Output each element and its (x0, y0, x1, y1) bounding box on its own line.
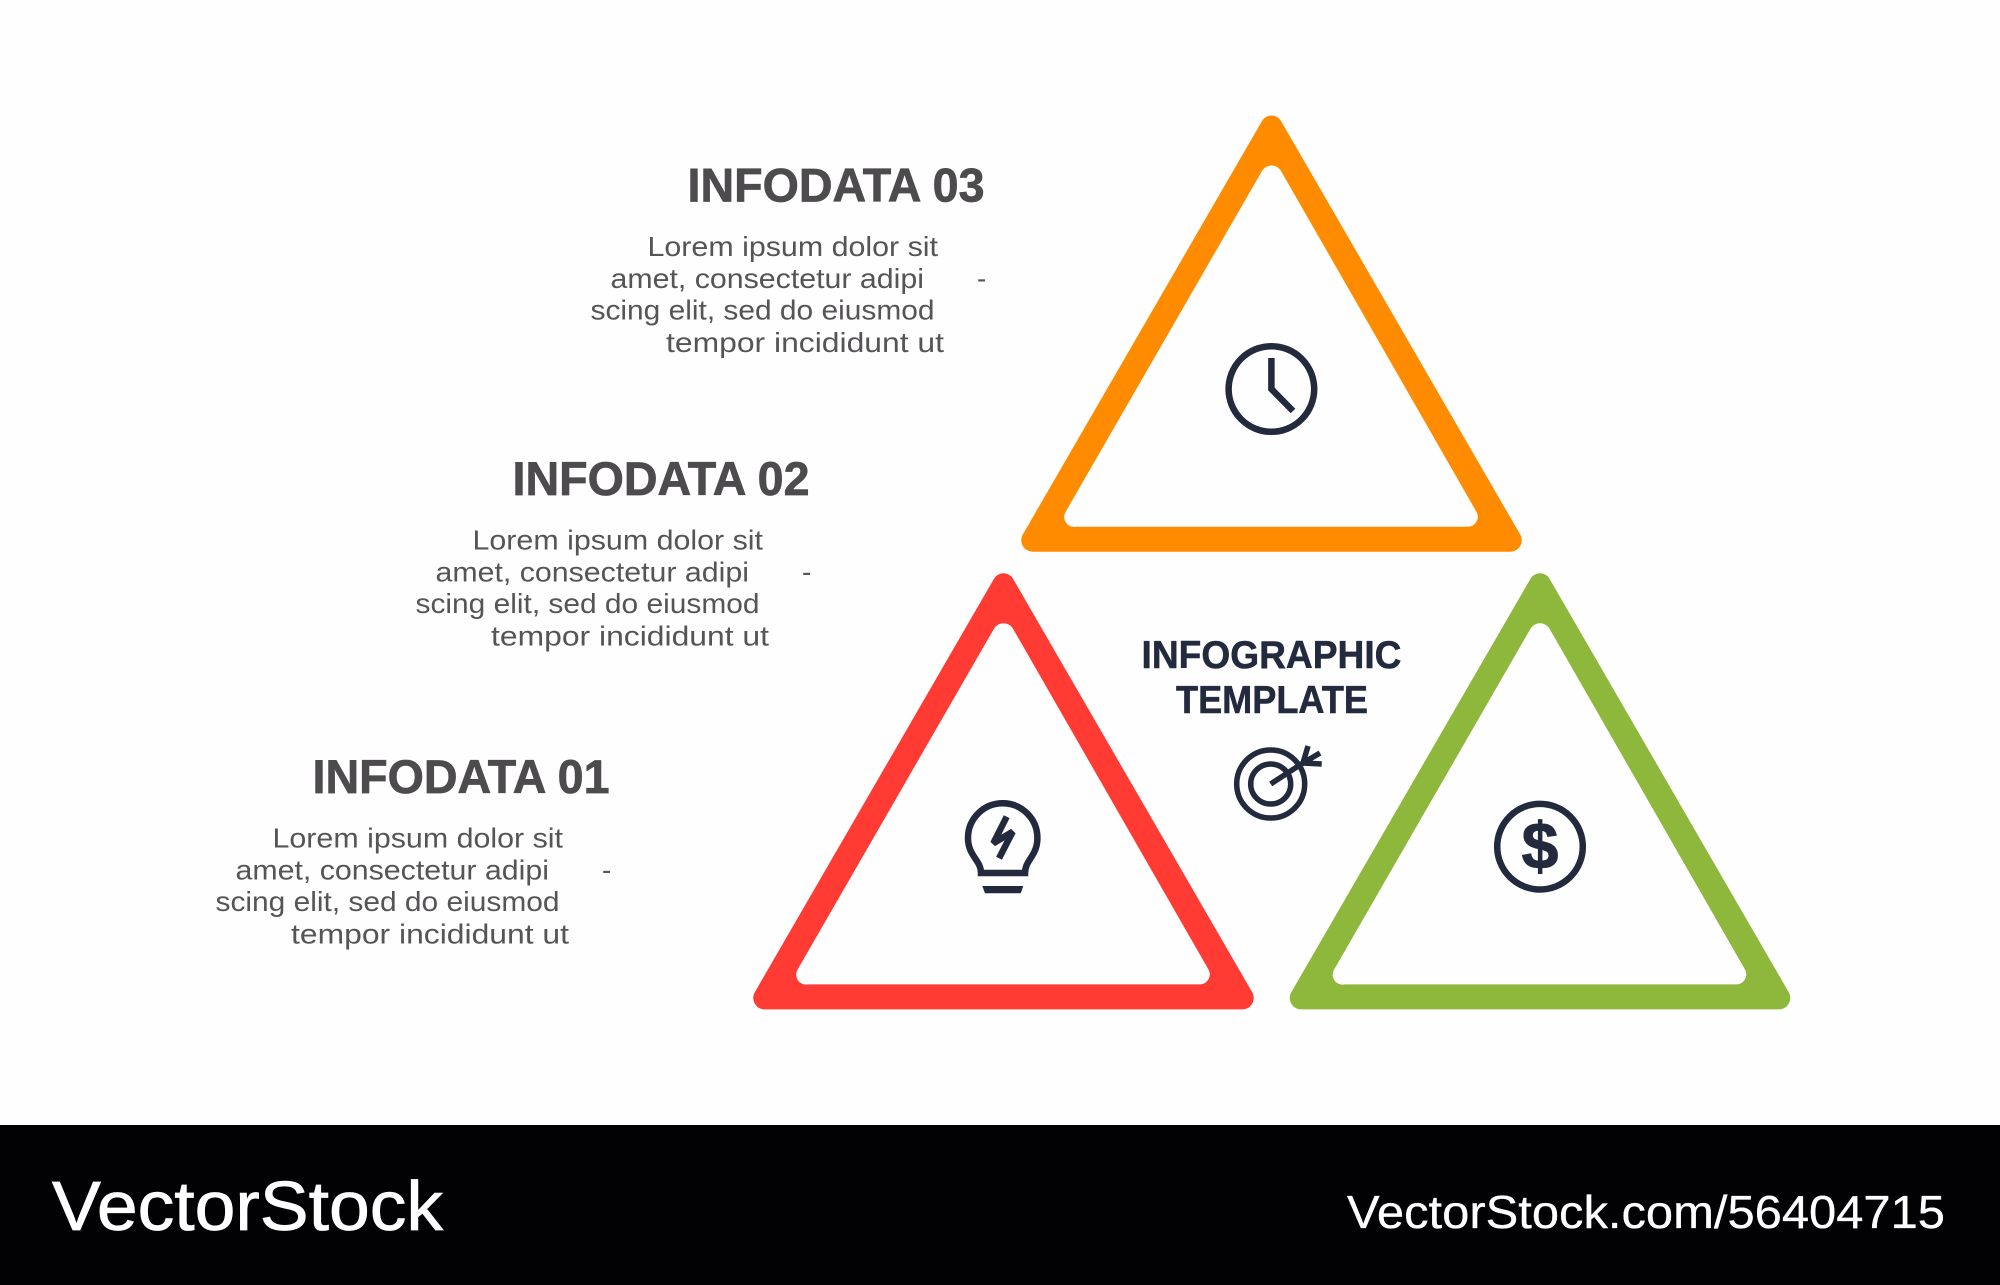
text block: infodata 01: Lorem ipsum dolor sit (272, 822, 563, 853)
triangle: green (1290, 573, 1790, 1009)
text block: infodata 03: INFODATA 03 (688, 158, 984, 212)
text block: infodata 01: - (602, 854, 611, 885)
icon: light bulb (968, 803, 1037, 893)
text block: infodata 02: scing elit, sed do eiusmod (416, 588, 760, 619)
text block: infodata 03: - (977, 263, 986, 294)
text block: infodata 01: amet, consectetur adipi (236, 854, 549, 885)
title: TEMPLATE (1176, 679, 1368, 722)
icon: dollar coin: $ (1522, 808, 1558, 882)
text block: infodata 02: tempor incididunt ut (491, 620, 769, 652)
icon: clock (1229, 346, 1314, 432)
triangle: orange (1021, 116, 1522, 552)
footer url: VectorStock.com/56404715 (1347, 1186, 1945, 1238)
text block: infodata 01: tempor incididunt ut (291, 918, 569, 950)
text block: infodata 03: Lorem ipsum dolor sit (648, 231, 938, 262)
icon: dollar coin (1497, 804, 1583, 890)
text block: infodata 01: INFODATA 01 (312, 750, 610, 803)
text block: infodata 01 (216, 750, 611, 950)
text block: infodata 02 (416, 452, 811, 652)
triangle: red (753, 573, 1254, 1009)
text block: infodata 02: - (802, 556, 811, 587)
title (1142, 634, 1402, 722)
footer logo: VectorStock (52, 1167, 444, 1245)
title: INFOGRAPHIC (1142, 634, 1402, 677)
icon: target with arrow (1237, 746, 1322, 818)
footer bar (0, 1125, 2000, 1285)
text block: infodata 02: Lorem ipsum dolor sit (472, 524, 763, 555)
text block: infodata 02: amet, consectetur adipi (436, 556, 749, 587)
text block: infodata 02: INFODATA 02 (512, 452, 810, 505)
text block: infodata 01: scing elit, sed do eiusmod (216, 886, 560, 917)
text block: infodata 03: scing elit, sed do eiusmod (590, 294, 934, 326)
text block: infodata 03: tempor incididunt ut (666, 327, 944, 358)
text block: infodata 03: amet, consectetur adipi (610, 263, 924, 294)
text block: infodata 03 (590, 158, 986, 358)
